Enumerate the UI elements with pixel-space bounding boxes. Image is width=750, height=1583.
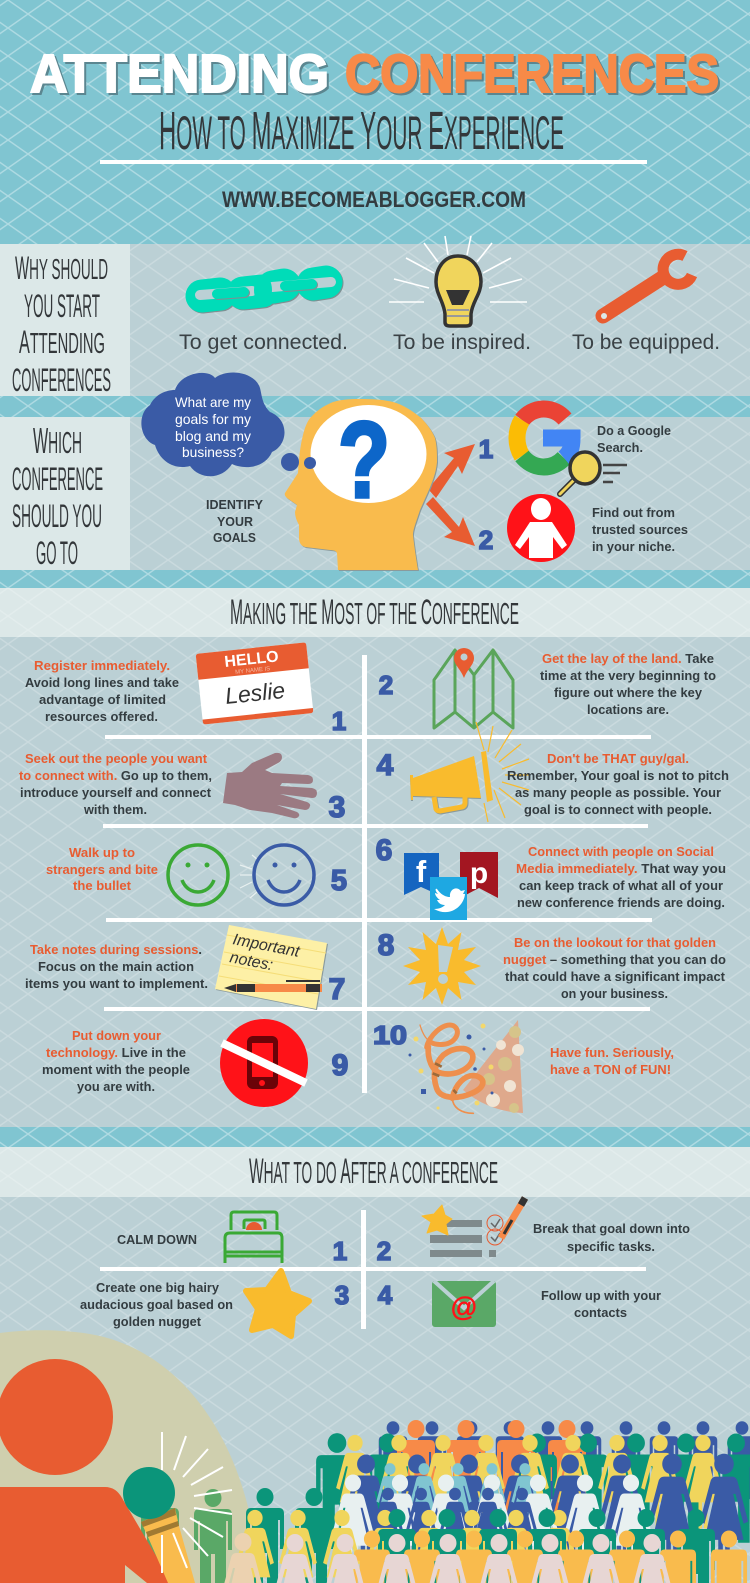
arrow down to option 2 [426,497,475,546]
icon: twitter [430,877,467,920]
tip 9 text [42,1028,190,1094]
number 8: 8 [378,929,394,962]
tip 9 text: Put down your [72,1028,161,1043]
tip 4 text: as many people as possible. Your [515,785,721,800]
heading: why should you start: ATTENDING [19,324,105,360]
title: CONFERENCES [345,44,719,104]
icon: task list [422,1198,525,1257]
grid lines [103,655,652,1093]
arrow up to option 1 [428,444,475,498]
panel: why attend: CONFERENCES [12,362,111,398]
icon: map with pin [434,648,513,728]
panel: after a conference [0,1147,750,1583]
step 3 text: golden nugget [113,1314,202,1329]
icon: no phone [220,1019,308,1107]
tip 3 text [19,751,212,817]
number 2: 2 [377,1236,391,1266]
website url: WWW.BECOMEABLOGGER.COM [222,187,526,212]
text: trusted sources: in your niche. [592,539,675,554]
subtitle: HOW TO MAXIMIZE YOUR EXPERIENCE [159,101,564,161]
tip 8 text: Be on the lookout for that golden [514,935,716,950]
step 3 text: audacious goal based on [80,1297,233,1312]
text: google search: Search. [597,440,643,455]
tip 4 text [507,751,729,817]
head with question mark: ? [338,399,390,520]
tip 7 text: items you want to implement. [25,976,208,991]
step 4 text: Follow up with your [541,1288,661,1303]
number 2: 2 [479,525,493,555]
tip 10 text [550,1045,674,1077]
panel: why attend [0,236,750,398]
icon: blue smiley [240,845,314,905]
panel: which conference: CONFERENCE [12,461,103,497]
number 5: 5 [331,865,347,897]
icon: person in red circle [507,494,575,562]
text: trusted sources [592,505,688,554]
head with question mark [285,399,437,570]
icon: hand [223,753,317,818]
icon: name tag: HELLO [224,648,279,671]
text: google search: Do a Google [597,423,671,438]
step 3 text: Create one big hairy [96,1280,220,1295]
label: identify your goals: IDENTIFY [206,497,263,512]
icon: sticky note with pen: Important [231,931,301,961]
label: identify your goals [206,497,263,545]
heading: what to do after a conference: WHAT TO DO AFTER A CONFERENCE [249,1152,498,1191]
heading: why should you start [12,250,111,398]
caption: connected: To get connected. [179,331,348,354]
tip 6 text: new conference friends are doing. [517,895,725,910]
icon: party hat and streamers [408,1020,524,1113]
speaker with microphone [0,1359,232,1583]
tip 1 text: Avoid long lines and take [25,675,179,690]
title rule [100,160,647,164]
tip 1 text: advantage of limited [39,692,166,707]
tip 3 text: introduce yourself and connect [20,785,212,800]
number 3: 3 [329,791,345,824]
tip 8 text: that could have a significant impact [505,969,726,984]
icon: sticky note with pen: notes: [228,949,274,974]
tip 3 text: Seek out the people you want [25,751,208,766]
tip 4 text: Remember, Your goal is not to pitch [507,768,729,783]
icon: green smiley [168,845,228,905]
step 2 text [533,1221,690,1254]
heading: which conference should you go to [12,420,103,571]
number 9: 9 [332,1049,348,1082]
tip 5 text [46,845,158,893]
icons: social media [404,852,498,920]
tip 8 text [503,935,726,1001]
text: trusted sources: Find out from [592,505,675,520]
big star [246,1271,309,1336]
heading: why should you start: WHY SHOULD [15,250,108,286]
tip 2 text [540,651,716,717]
icon: google G [517,409,572,467]
tip 4 text: Don't be THAT guy/gal. [547,751,689,766]
thought cloud: goals for my [175,411,251,427]
number 2: 2 [379,670,393,700]
tip 3 text: with them. [83,802,147,817]
tip 8 text: nugget – something that you can do [503,952,726,967]
title [30,44,719,104]
step 2 text: specific tasks. [567,1239,655,1254]
tip 9 text: you are with. [77,1079,155,1094]
icon: facebook: f [416,854,427,889]
tip 10 text: have a TON of FUN! [550,1062,671,1077]
icon: wrench [601,254,692,319]
step 1 text: CALM DOWN [117,1232,197,1247]
tip 2 text: time at the very beginning to [540,668,716,683]
step 2 text: Break that goal down into [533,1221,690,1236]
tip 5 text: strangers and bite [46,862,158,877]
icon: bed [225,1212,282,1263]
step 4 text: contacts [574,1305,627,1320]
label: identify your goals: GOALS [213,530,256,545]
tip 1 text [25,658,179,724]
icon: name tag: MY NAME IS [235,666,271,676]
step 3 text [80,1280,233,1329]
grid lines [100,1210,646,1329]
microphone [123,1467,195,1583]
crowd [141,1420,750,1583]
number 7: 7 [329,973,345,1006]
icon: chain [200,275,331,305]
tip 1 text: Register immediately. [34,658,170,673]
icon: megaphone [410,722,530,822]
text: trusted sources: trusted sources [592,522,688,537]
tip 7 text [25,942,208,991]
icon: name tag [196,642,313,725]
number 3: 3 [335,1280,349,1310]
icon: envelope [432,1281,496,1327]
tip 9 text: moment with the people [42,1062,190,1077]
tip 4 text: goal is to connect with people. [524,802,712,817]
heading: which conference should you go to: GO TO [36,535,78,571]
title: ATTENDING [30,44,329,104]
icon: light bulb [389,236,527,326]
icon: name tag: Leslie [224,677,286,709]
tip 3 text: to connect with. Go up to them, [19,768,212,783]
tip 9 text: technology. Live in the [46,1045,186,1060]
heading: making the most of the conference: MAKING THE MOST OF THE CONFERENCE [230,593,519,632]
tip 6 text: Media immediately. That way you [516,861,726,876]
number 1: 1 [479,434,493,464]
tip 7 text: Focus on the main action [38,959,194,974]
number 6: 6 [376,834,392,867]
panel: which conference [0,373,750,571]
caption: equipped: To be equipped. [572,331,720,354]
icon: sticky note with pen [215,925,327,1009]
tip 1 text: resources offered. [45,709,158,724]
caption: inspired: To be inspired. [393,331,531,354]
thought cloud: blog and my [175,428,251,444]
tip 6 text: Connect with people on Social [528,844,714,859]
step 4 text [541,1288,661,1320]
heading: which conference should you go to: WHICH [33,420,82,461]
panel: which conference: SHOULD YOU [12,498,102,534]
tip 2 text: locations are. [587,702,669,717]
number 4: 4 [377,749,394,782]
tip 2 text: Get the lay of the land. Take [542,651,714,666]
number 10: 10 [373,1020,407,1050]
tip 8 text: on your business. [561,986,668,1001]
panel: why attend: YOU START [24,288,100,324]
label: identify your goals: YOUR [217,514,254,529]
icon: pinterest: p [470,857,488,890]
number 1: 1 [332,706,346,736]
number 4: 4 [378,1280,393,1310]
number 1: 1 [333,1236,347,1266]
tip 6 text: can keep track of what all of your [519,878,723,893]
icon: burst with exclamation [403,927,481,1005]
tip 10 text: Have fun. Seriously, [550,1045,674,1060]
tip 7 text: Take notes during sessions. [30,942,202,957]
thought cloud: What are my [175,394,251,410]
thought cloud: business? [182,444,244,460]
icon: envelope: @ [450,1292,478,1322]
text: google search [597,423,671,455]
thought cloud [141,373,316,476]
tip 2 text: figure out where the key [554,685,703,700]
icon: magnifier [560,452,627,494]
panel: making the most [0,588,750,1127]
tip 6 text [516,844,726,910]
tip 5 text: the bullet [73,878,132,893]
tip 5 text: Walk up to [69,845,135,860]
spotlight [0,1330,258,1583]
